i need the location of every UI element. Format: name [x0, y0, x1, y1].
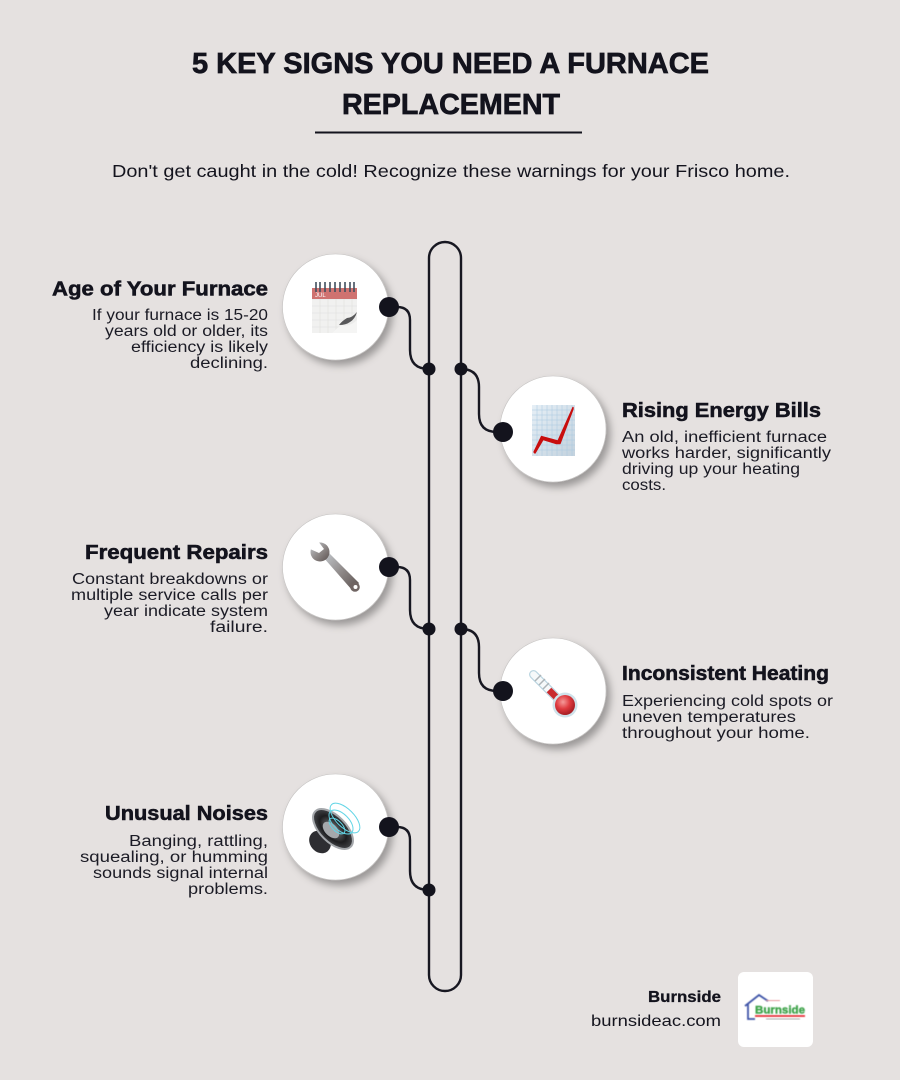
icon: calendar: JUL: [315, 293, 326, 299]
connector dot: age: [379, 297, 399, 317]
heading: age: Age of Your Furnace: [52, 278, 268, 300]
panel: rising energy bills: [454, 362, 831, 494]
heading: bills: Rising Energy Bills: [622, 400, 821, 422]
icon circle: age: [282, 254, 388, 360]
heading: noises: Unusual Noises: [105, 803, 268, 825]
timeline node: heating: [454, 622, 468, 636]
timeline node: bills: [454, 362, 468, 376]
text block: bills: [621, 429, 831, 494]
connector dot: bills: [493, 422, 513, 442]
icon: speaker: [305, 798, 365, 858]
panel: frequent repairs: [71, 514, 436, 636]
connector: noises: [389, 827, 429, 890]
panel: unusual noises: [80, 774, 436, 898]
title: REPLACEMENT: [342, 89, 560, 121]
text block: age: declining.: [190, 355, 268, 372]
text block: bills: An old, inefficient furnace: [622, 429, 827, 446]
title: 5 KEY SIGNS YOU NEED A FURNACE: [192, 48, 709, 80]
connector dot: heating: [493, 681, 513, 701]
text block: heating: uneven temperatures: [622, 709, 796, 726]
connector dot: repairs: [379, 557, 399, 577]
icon: wrench: [310, 540, 360, 592]
text block: noises: problems.: [188, 881, 268, 898]
connector: bills: [461, 369, 503, 432]
logo card: [738, 972, 813, 1047]
connector dot: noises: [379, 817, 399, 837]
text block: bills: costs.: [622, 477, 666, 494]
title: [192, 48, 709, 134]
icon: thermometer: [534, 674, 578, 718]
text block: bills: works harder, significantly: [621, 445, 831, 462]
footer brand: [591, 972, 813, 1047]
text block: repairs: failure.: [210, 619, 268, 636]
text block: repairs: [71, 571, 268, 636]
icon: rising chart: [532, 405, 575, 456]
connector: age: [389, 307, 429, 369]
website: burnsideac.com: [591, 1013, 721, 1030]
logo stripe: [755, 1015, 805, 1017]
subtitle: Don't get caught in the cold! Recognize these warnings for your Frisco home.: [112, 161, 790, 181]
text block: repairs: Constant breakdowns or: [72, 571, 268, 588]
icon: logo house: [745, 995, 768, 1019]
panel: age of your furnace: [52, 254, 436, 376]
icon circle: noises: [282, 774, 388, 880]
text block: heating: [622, 693, 833, 742]
logo wordmark: Burnside: [755, 1004, 805, 1016]
icon circle: bills: [500, 376, 606, 482]
text block: noises: squealing, or humming: [80, 849, 268, 866]
text block: noises: [80, 833, 268, 898]
text block: age: efficiency is likely: [131, 339, 268, 356]
text block: bills: driving up your heating: [622, 461, 800, 478]
connector: repairs: [389, 567, 429, 629]
heading: repairs: Frequent Repairs: [85, 542, 268, 564]
central timeline track: [429, 242, 461, 991]
text block: noises: Banging, rattling,: [129, 833, 268, 850]
icon circle: repairs: [282, 514, 388, 620]
icon circle: heating: [500, 638, 606, 744]
timeline node: noises: [422, 884, 436, 896]
text block: repairs: year indicate system: [104, 603, 268, 620]
text block: repairs: multiple service calls per: [71, 587, 268, 604]
text block: noises: sounds signal internal: [93, 865, 268, 882]
text block: heating: Experiencing cold spots or: [622, 693, 833, 710]
text block: age: [92, 307, 268, 372]
brand name: Burnside: [648, 989, 721, 1006]
timeline node: age: [422, 362, 436, 376]
text block: heating: throughout your home.: [622, 725, 810, 742]
heading: heating: Inconsistent Heating: [622, 663, 829, 685]
panel: inconsistent heating: [454, 622, 833, 744]
icon: calendar: [312, 282, 357, 333]
text block: age: If your furnace is 15-20: [92, 307, 268, 324]
connector: heating: [461, 629, 503, 691]
timeline node: repairs: [422, 622, 436, 636]
text block: age: years old or older, its: [105, 323, 268, 340]
